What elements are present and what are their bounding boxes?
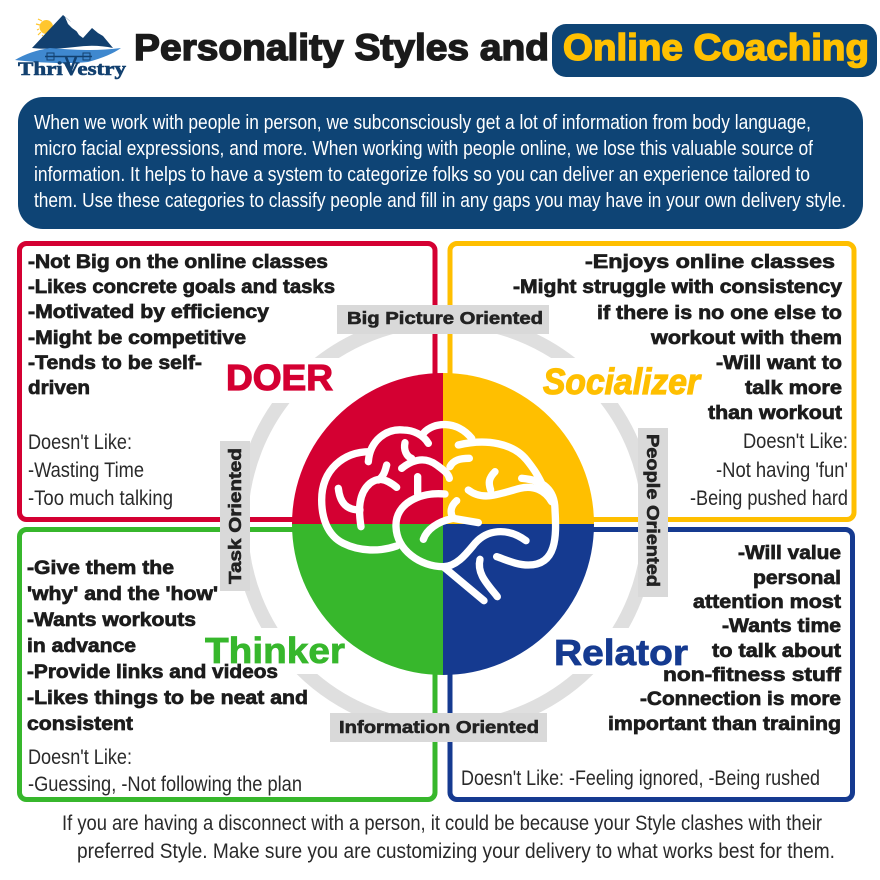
panel: Socializer <box>450 244 854 520</box>
panel: Doer: -Motivated by efficiency <box>28 302 269 323</box>
icon: mountains <box>32 15 113 49</box>
panel: Relator: -Will value <box>738 543 841 564</box>
heading: DOER: DOER <box>226 357 333 398</box>
panel: Socializer: -Not having 'fun' <box>716 459 848 482</box>
gray orientation ring <box>241 320 649 728</box>
footer text <box>62 812 835 863</box>
panel: Socializer: talk more <box>745 378 842 399</box>
panel: Socializer: Doesn't Like: <box>743 430 848 453</box>
panel: Thinker: -Guessing, -Not following the plan <box>28 773 302 796</box>
panel: Relator: important than training <box>608 714 841 735</box>
quadrant: blue <box>443 524 594 675</box>
panel: Doer: -Likes concrete goals and tasks <box>28 277 335 298</box>
panel: Thinker: in advance <box>27 636 136 657</box>
label: Information Oriented: Information Oriented <box>339 717 539 737</box>
heading: Socializer: Socializer <box>543 361 702 402</box>
logo: ThriVestry <box>15 15 127 80</box>
panel: Relator <box>450 530 852 800</box>
label: Big Picture Oriented: Big Picture Oriented <box>347 308 543 328</box>
panel: Thinker <box>20 530 435 800</box>
panel: Thinker: consistent <box>27 714 134 735</box>
panel: Doer: -Tends to be self- <box>28 353 202 374</box>
panel: introduction <box>18 97 863 229</box>
panel: Relator: -Connection is more <box>640 689 841 710</box>
panel: Doer: Doesn't Like: <box>28 431 132 454</box>
panel: Relator: attention most <box>693 592 842 613</box>
panel: Socializer: -Enjoys online classes <box>585 252 835 273</box>
icon: water swoosh <box>15 48 121 63</box>
panel: Relator: -Wants time <box>722 616 841 637</box>
label: People Oriented: People Oriented <box>643 434 663 587</box>
panel: Thinker: 'why' and the 'how' <box>27 584 218 605</box>
icon: brain <box>322 425 556 601</box>
icon: barbell lifter <box>45 53 92 70</box>
label: Task Oriented: Task Oriented <box>225 448 245 584</box>
icon: mountain snow <box>65 17 79 33</box>
panel: Thinker: -Provide links and videos <box>27 662 278 683</box>
panel: Socializer: -Might struggle with consistency <box>513 277 842 298</box>
quadrant: yellow <box>443 373 594 524</box>
label: Big Picture Oriented <box>337 305 549 334</box>
icon: sun <box>36 19 53 36</box>
title text: Personality Styles and <box>134 27 549 68</box>
heading: Thinker: Thinker <box>205 630 345 671</box>
panel: Doer: -Too much talking <box>28 487 173 510</box>
panel: Socializer: than workout <box>708 403 843 424</box>
panel: Socializer: -Being pushed hard <box>690 487 848 510</box>
panel: Relator: to talk about <box>712 641 842 662</box>
panel: Socializer: if there is no one else to <box>597 303 842 324</box>
quadrant: red <box>292 373 443 524</box>
panel: Thinker: -Wants workouts <box>27 610 196 631</box>
label: Task Oriented <box>220 441 250 591</box>
logo wordmark: ThriVestry <box>18 59 127 80</box>
panel: Thinker: Doesn't Like: <box>28 746 132 769</box>
panel: Doer: -Wasting Time <box>28 459 144 482</box>
panel: Doer: -Might be competitive <box>28 328 246 349</box>
panel: Relator: Doesn't Like: -Feeling ignored, -Being rushed <box>461 767 820 790</box>
title pill <box>552 24 877 77</box>
panel: Thinker: -Likes things to be neat and <box>27 688 308 709</box>
label: People Oriented <box>638 428 668 597</box>
panel: Doer: driven <box>28 378 90 399</box>
panel: Socializer: -Will want to <box>716 353 842 374</box>
panel: Relator: personal <box>753 568 841 589</box>
panel: Doer: -Not Big on the online classes <box>28 252 328 273</box>
title <box>134 24 877 77</box>
panel: Socializer: workout with them <box>650 328 842 349</box>
label: Information Oriented <box>330 713 547 742</box>
panel: Relator: non-fitness stuff <box>663 665 842 686</box>
chart: four-quadrant brain circle <box>292 373 594 675</box>
panel: Thinker: -Give them the <box>27 558 174 579</box>
quadrant: green <box>292 524 443 675</box>
heading: Relator: Relator <box>554 632 688 673</box>
panel: Doer <box>20 244 435 520</box>
title highlight text: Online Coaching <box>563 27 869 68</box>
